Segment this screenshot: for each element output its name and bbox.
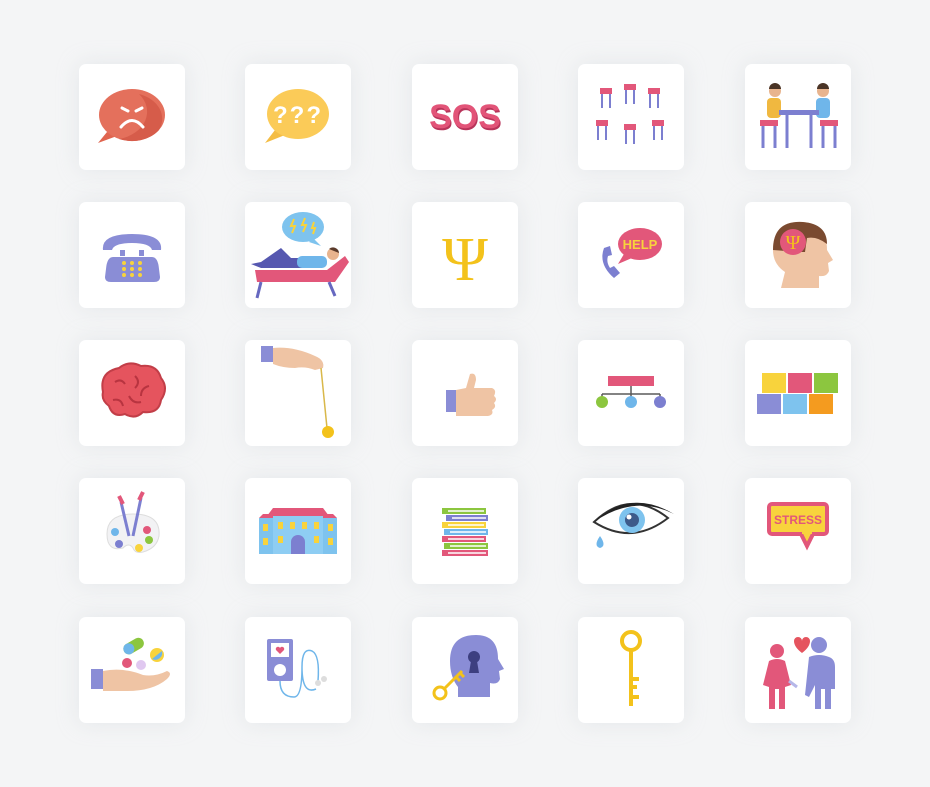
icon: thumbs up hand <box>446 374 496 416</box>
icon: couple with heart <box>763 637 835 709</box>
card: stress bubble <box>745 478 851 584</box>
icon: colored blocks <box>757 373 838 414</box>
card: org chart <box>578 340 684 446</box>
card: palette <box>79 478 185 584</box>
icon: hospital building <box>259 508 337 554</box>
card: key <box>578 617 684 723</box>
icon: phone with help bubble: HELP <box>623 237 658 252</box>
icon: yellow question bubble: ??? <box>273 102 323 129</box>
icon: man on couch <box>251 212 349 298</box>
card: help call <box>578 202 684 308</box>
icon: brain <box>102 363 165 417</box>
icon: circle of chairs <box>596 84 664 144</box>
icon: SOS text: SOS <box>430 100 502 138</box>
card: keyhole head <box>412 617 518 723</box>
icon: head with keyhole and key <box>434 635 504 699</box>
icon: hierarchy diagram <box>596 376 666 408</box>
card: eye tear <box>578 478 684 584</box>
card: pendulum <box>245 340 351 446</box>
card: chairs <box>578 64 684 170</box>
icon: golden key <box>622 632 640 706</box>
card: angry bubble <box>79 64 185 170</box>
icon: music player with earphones <box>267 639 327 697</box>
icon: paint palette <box>107 492 159 552</box>
card: therapy couch <box>245 202 351 308</box>
card: head psi <box>745 202 851 308</box>
card: question bubble <box>245 64 351 170</box>
icon: meeting <box>760 83 838 148</box>
icon: stack of books <box>442 508 488 556</box>
card: psi <box>412 202 518 308</box>
card: blocks <box>745 340 851 446</box>
card: two people at table <box>745 64 851 170</box>
icon: STRESS sign: STRESS <box>774 513 822 527</box>
icon: desk phone <box>103 234 161 282</box>
icon: psi symbol: Ψ <box>442 226 488 294</box>
card: thumbs up <box>412 340 518 446</box>
card: SOS <box>412 64 518 170</box>
card: couple <box>745 617 851 723</box>
icon: angry speech bubble <box>98 89 165 143</box>
icon: hand with pendulum <box>261 346 334 438</box>
icon: SOS text: SOS <box>429 98 501 136</box>
icon: hand with pills <box>91 636 170 691</box>
card: books <box>412 478 518 584</box>
card: brain <box>79 340 185 446</box>
icon: crying eye <box>594 503 674 548</box>
card: pills <box>79 617 185 723</box>
card: telephone <box>79 202 185 308</box>
card: mp3 player <box>245 617 351 723</box>
icon: head profile with psi: Ψ <box>786 232 801 254</box>
card: building <box>245 478 351 584</box>
